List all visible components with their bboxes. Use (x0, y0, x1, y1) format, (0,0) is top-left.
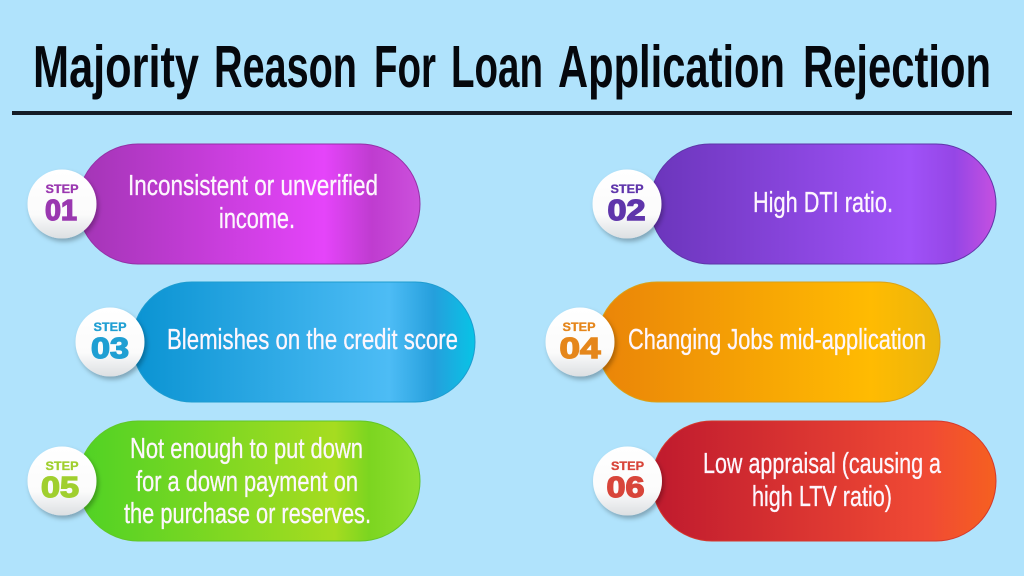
panel: step 06: STEP (611, 461, 644, 473)
title: Majority (33, 34, 199, 100)
panel: step 04: 04 (560, 333, 600, 365)
panel: step 02: 02 (608, 195, 646, 227)
panel: step 03: STEP (94, 322, 127, 334)
panel: step 02: High DTI ratio. (753, 187, 893, 219)
panel: step 01: STEP (46, 184, 79, 196)
panel: step 05: the purchase or reserves. (124, 498, 371, 530)
panel: step 06: 06 (606, 472, 644, 504)
title: Reason (214, 34, 357, 100)
panel: step 04: Changing Jobs mid-application (628, 324, 926, 356)
panel: step 06 (593, 421, 996, 541)
title: Application (558, 34, 785, 100)
panel: step 03 (76, 282, 475, 402)
panel: step 06: high LTV ratio) (752, 481, 892, 513)
panel: step 04: STEP (562, 322, 596, 334)
panel: step 05: STEP (46, 461, 79, 473)
title: Loan (451, 34, 543, 100)
panel: step 05: 05 (41, 472, 79, 504)
panel: step 03: Blemishes on the credit score (167, 324, 458, 356)
panel: step 02 (592, 144, 996, 264)
panel: step 05 (28, 421, 420, 541)
panel: step 04 (546, 282, 940, 402)
title (33, 34, 991, 100)
panel: step 01 (28, 144, 420, 264)
panel: step 06: Low appraisal (causing a (703, 448, 942, 480)
panel: step 01: income. (219, 203, 295, 235)
panel: step 03: 03 (91, 333, 129, 365)
panel: step 02: STEP (610, 184, 644, 196)
panel: step 05: for a down payment on (136, 466, 358, 498)
title: For (374, 34, 436, 100)
panel: step 01: Inconsistent or unverified (128, 170, 378, 202)
panel: step 01: 01 (45, 195, 77, 227)
panel: step 05: Not enough to put down (130, 433, 363, 465)
